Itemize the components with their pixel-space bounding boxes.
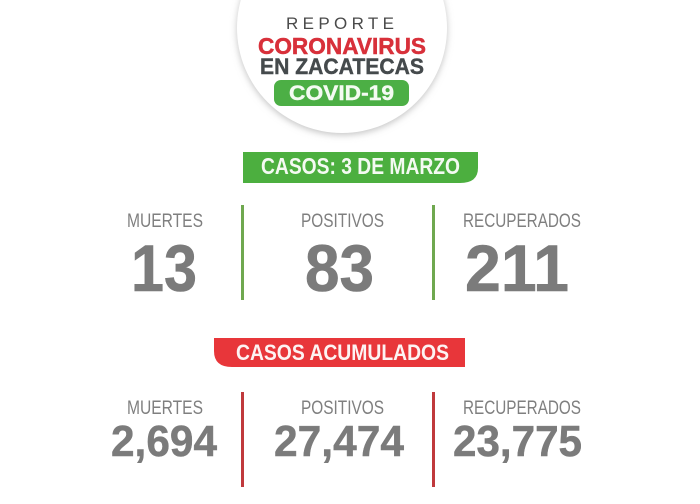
stat: muertes del dia: 13: [131, 231, 197, 305]
stat: recuperados acumulados: 23,775: [453, 417, 582, 466]
stat: recuperados acumulados: RECUPERADOS: [463, 398, 581, 419]
logo: reporte: REPORTE: [286, 14, 394, 33]
stat: positivos del dia: POSITIVOS: [301, 211, 384, 232]
stat: positivos acumulados: 27,474: [274, 417, 405, 466]
logo badge: [237, 0, 447, 135]
divider: red right: [432, 392, 435, 487]
stat: muertes acumuladas: MUERTES: [127, 398, 203, 419]
banner: casos acumulados: CASOS ACUMULADOS: [236, 340, 449, 365]
logo: coronavirus: CORONAVIRUS: [258, 33, 426, 59]
stat: muertes del dia: MUERTES: [127, 211, 203, 232]
stat: recuperados del dia: RECUPERADOS: [463, 211, 581, 232]
stat: recuperados acumulados: [453, 398, 582, 466]
divider: green left: [241, 205, 244, 300]
logo: covid-19 pill: COVID-19: [289, 82, 394, 105]
banner: casos del dia: CASOS: 3 DE MARZO: [261, 153, 460, 179]
stat: positivos del dia: [301, 211, 384, 305]
divider: green right: [432, 205, 435, 300]
logo: en zacatecas: EN ZACATECAS: [260, 54, 424, 79]
logo: covid-19 pill: [274, 80, 409, 106]
stat: muertes acumuladas: 2,694: [111, 417, 218, 466]
divider: red left: [241, 392, 244, 487]
stat: positivos acumulados: POSITIVOS: [301, 398, 384, 419]
stat: recuperados del dia: 211: [465, 231, 569, 305]
stat: positivos del dia: 83: [305, 231, 374, 305]
